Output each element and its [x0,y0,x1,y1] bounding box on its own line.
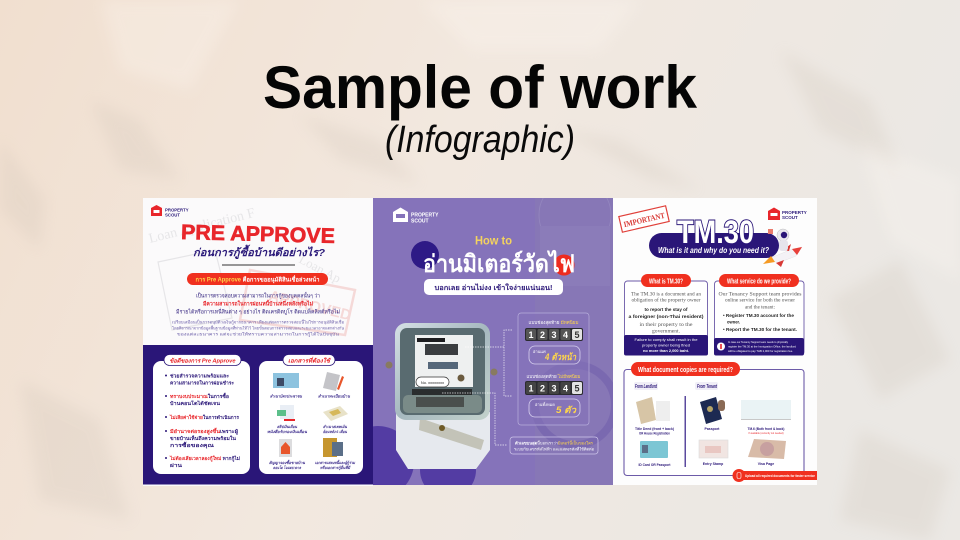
card: what service: register the TM.30 at the Immigration Office, the landlord [728,344,796,348]
card: what is tm.30: a foreigner (non-Thai resident) [628,314,704,319]
benefit list: ช่วยสำรวจความพร้อมและ [170,372,229,380]
document labels: สำเนาทะเบียนบ้าน [318,394,350,398]
result pill: 5 digits: อ่านทั้งหมด [535,400,555,407]
logo: PROPERTY [411,212,439,218]
callout note: ตัวเลขบนสุด นี้บอกเราว่ามิเตอร์นี้เป็นของใคร [515,438,593,446]
card: what service: owner. [727,320,740,324]
card: benefits [153,354,250,474]
card: what service: Our Tenancy Support team provides [718,292,802,298]
label: from tenant [695,382,718,390]
intro text: เปรียบเสมือนเป็นการอนุมัติวงเงินกู้จากธนาคาร เพียงแต่ผลการตรวจสอบนี้ไม่ใช่การอนุมัติสินเชื่อ [172,318,344,326]
intro text: มีรายได้หรือการเหนี่สินต่าง ๆ อย่างไร ติดเครดิตบูโร ติดแบล็คลิสต์หรือไม่ [176,308,340,316]
logo [151,205,189,218]
doc: passport: Passport [705,427,720,431]
callout note: ระบบกับเลขรหัสไฟฟ้า และแสดงรหัสที่ใช้ติดต่อ [514,446,594,452]
document labels [267,394,355,471]
callout note [510,437,598,454]
card: what is tm.30: What is TM.30? [649,278,683,286]
card: what service: and the tenant: [745,306,775,310]
benefit list: ไม่ต้องเสียเวลาลองกู้ใหม่ หากกู้ไม่ [169,455,240,463]
document labels: สำเนาสเตทเม้น [323,424,347,429]
digit row: with decimal: 4 [563,330,568,340]
white pill: subtitle: บอกเลย อ่านไม่งง เข้าใจง่ายแน่นอน! [434,283,552,292]
card: what service [714,274,804,356]
logo: PROPERTY [165,208,189,212]
benefit list: ทราบงบประมาณ ในการซื้อ [170,392,229,400]
meter wiring [412,389,472,395]
intro text: ของแต่ละธนาคาร แต่จะช่วยให้ทราบความสามารถในการกู้ได้ในปัจจุบัน [177,332,339,338]
navy section [143,345,373,484]
doc: tm.6 [741,400,791,435]
doc: title deed: OR House Registration [639,432,670,436]
icon: bank slip [277,405,295,421]
document labels: สำเนาบัตรประชาชน [270,394,302,398]
card: documents [259,354,363,474]
document labels: สัญญาจองซื้อขายบ้าน [269,459,305,465]
red ribbon: upload note: Upload all required documents for faster service [745,474,815,478]
result pill: 4 digits: อ่านแค่ [533,349,546,354]
panel: electricity meter [373,198,613,485]
doc: title deed [635,397,674,436]
stamp: important: IMPORTANT [623,211,666,229]
card: what service: What service do we provide? [727,278,791,286]
label: from landlord: From Landlord [635,384,658,390]
faded loan application document [147,206,355,335]
card: what is tm.30: to report the stay of [644,307,688,312]
meter glass case [395,323,490,420]
heading: thai subtitle: ก่อนการกู้ซื้อบ้านดีอย่างไร? [193,244,326,259]
card: required documents: What document copies are required? [638,365,733,374]
meter side lugs [386,362,392,368]
benefit list: บ้านคอนโดได้ชัดเจน [170,400,221,407]
dashed connectors [442,330,512,445]
digit row: no decimal: 1 [528,384,534,394]
digit row: with decimal: 3 [551,330,557,340]
card: what service: will be obligated to pay THB 2,000 for registration fee. [728,349,793,353]
navy title pill: What is it and why do you need it? [658,246,769,255]
card: what is tm.30: in their property to the [640,323,692,328]
digit row: no decimal [525,381,583,395]
doc: visa page: Visa Page [758,462,774,466]
logo [768,208,807,220]
benefit list: ไม่เสียค่าใช้จ่ายในการดำเนินการ [169,414,239,421]
logo: SCOUT [782,215,798,220]
logo: SCOUT [165,212,180,218]
icon: documents [323,438,343,457]
title: Sample of work [263,54,698,121]
meter lead seal [419,418,484,450]
doc: visa page [748,439,786,466]
outlined reading box: แบบช่องสุดท้าย มีทศนิยม [528,320,579,326]
logo [393,208,438,222]
white pill: subtitle [424,279,563,295]
doc: passport [700,397,725,431]
faded meter backdrop [536,198,613,449]
meter base [396,412,490,469]
benefit list: ความสามารถในการผ่อนชำระ [170,380,234,386]
intro text: โดยพิจารณาจากข้อมูลพื้นฐานข้อมูลที่ท่านให้ไว้ โดยขั้นตอนการตรวจสอบและระยะเวลาอาจแตกต่างกัน [172,324,344,332]
digit row: no decimal: 2 [540,384,545,394]
stamp: important [619,206,669,232]
decorative blobs [373,426,476,485]
document labels: หนังสือรับรองเงินเดือน [267,429,307,434]
card: what service: • Register TM.30 account for the [723,313,795,318]
result pill: 5 digits: 5 ตัว [556,405,577,415]
result pill: 4 digits: 4 ตัวหน้า [544,352,577,362]
benefit list: ขายบ้านเห็นถึงความพร้อมใน [170,434,237,442]
logo: PROPERTY [782,210,807,215]
doc: tm.6: If available (currently not needed) [748,432,784,435]
subtitle: (Infographic) [385,119,575,161]
result pill: 5 digits [529,399,580,417]
intro text: เป็นการตรวจสอบความสามารถในการกู้ของบุคคลนั้นๆ ว่า [196,292,320,300]
benefit list: ผ่าน [170,463,183,469]
digit row: no decimal: 4 [563,384,568,394]
heading: thai: อ่านมิเตอร์วัดไฟ [423,249,575,278]
benefit list: มีอำนาจต่อรองสูงขึ้น เพราะผู้ [170,427,238,436]
red ribbon: upload note [732,469,817,482]
card: what is tm.30: property owner being fined [642,342,690,348]
icon: id card [273,373,299,388]
red pill: definition: การ Pre Approve คือการขออนุมัติสินเชื่อล่วงหน้า [196,274,320,284]
document labels: ย้อนหลัง 6 เดือน [323,429,347,434]
icon: warning [717,342,725,350]
doc: tm.6: TM.6 (Both front & back) [748,427,784,431]
doc: id card [638,441,671,467]
digit row: with decimal: 2 [540,330,545,340]
document labels: สลิปเงินเดือน [277,424,297,429]
digit row: with decimal [525,328,583,341]
heading: tm.30: TM.30 [677,214,754,250]
card: what is tm.30: no more than 2,000 baht. [643,348,689,353]
document labels: คอนโด โฉนดบาดาล [273,465,301,470]
faded loan application document: APPROVED [267,287,353,324]
icon: house contract [279,439,292,457]
heading: pre approve: PRE APPROVE [181,221,335,248]
card: what is tm.30: government. [652,330,680,334]
intro text [172,292,344,338]
meter photo: No. xxxxxxxx [421,380,444,385]
document labels: เอกสารแสดงหนี้และผู้กู้ร่วม [315,459,355,466]
doc: entry stamp: Entry Stamp [703,462,723,466]
card: documents: เอกสารที่ต้องใช้ [288,356,332,364]
icon: statement [323,406,348,421]
meter face [415,335,473,387]
digit row: with decimal: 5 [574,330,580,340]
outlined reading box [518,313,589,425]
icon: house registration [323,372,344,391]
card: what is tm.30: The TM.30 is a document and an [631,292,702,298]
panel: pre approve [143,198,373,486]
faded loan application document: Loan Application F [147,206,257,247]
card: what service: In case our Tenancy Support team needs to physically [728,340,788,344]
heading: how to: How to [475,234,512,248]
card: what is tm.30: Failure to comply shall result in the [634,337,698,342]
digit row: no decimal: 3 [551,384,557,394]
doc: id card: ID Card OR Passport [638,463,671,467]
label: from tenant: From Tenant [697,384,717,390]
red pill: definition [187,273,328,285]
card: what service: online service for both the owner [725,298,795,304]
navy title pill [649,233,779,258]
card: what is tm.30 [624,274,708,356]
doc: title deed: Title Deed (front + back) [635,427,674,431]
document labels: หรือเอกสารกู้อื่นที่มี [320,464,351,471]
card: what is tm.30: obligation of the property owner [632,298,701,304]
panel: tm.30 [613,198,817,485]
label: from landlord [634,382,658,390]
benefit list: การซื้อของคุณ [170,441,215,449]
card: required documents [624,362,804,476]
heading accent circles [411,241,574,276]
result pill: 4 digits [529,346,580,364]
faded loan application document: Loan Ap [297,251,343,286]
card: what service: • Report the TM.30 for the tenant. [723,327,797,332]
icon: astronaut on rocket [763,229,802,267]
intro text: มีความสามารถในการผ่อนหนี้บ้านหนึ่งหลังหรือไม่ [203,298,313,308]
benefit list [165,372,240,469]
meter photo [386,323,498,469]
logo: SCOUT [411,218,428,224]
doc: entry stamp [699,440,728,466]
card: benefits: ข้อดีของการ Pre Approve [170,358,236,364]
outlined reading box: แบบช่องสุดท้าย ไม่มีทศนิยม [526,374,581,380]
digit row: no decimal: 5 [574,384,580,394]
digit row: with decimal: 1 [528,330,534,340]
